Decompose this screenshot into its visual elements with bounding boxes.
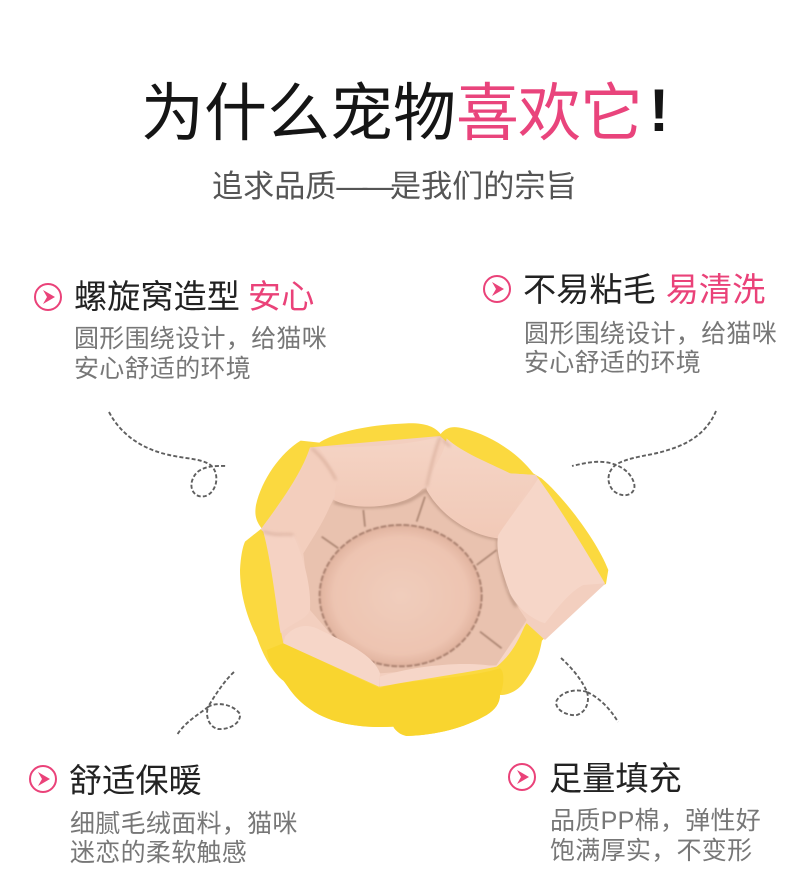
yellow outer shell [240, 423, 608, 736]
heading: 足量填充 [549, 761, 682, 798]
description: 品质PP棉，弹性好 [550, 807, 761, 835]
description [70, 810, 298, 867]
ring seams [322, 497, 502, 648]
heading: 舒适保暖 [69, 763, 202, 800]
description [550, 807, 761, 865]
panel: easy to clean [483, 272, 777, 377]
description: 安心舒适的环境 [524, 349, 701, 377]
panel: comfortable and warm [29, 763, 298, 867]
icon: arrow circle [483, 275, 511, 303]
panel: ample filling [508, 761, 761, 865]
description: 安心舒适的环境 [74, 355, 251, 383]
panel: spiral nest shape [34, 279, 327, 383]
heading: 不易粘毛 易清洗 [523, 272, 765, 309]
petal: upper left [262, 448, 337, 553]
petal: right [497, 478, 605, 623]
title: ! [649, 77, 669, 144]
description [524, 320, 777, 377]
description: 圆形围绕设计，给猫咪 [74, 325, 327, 353]
description: 细腻毛绒面料，猫咪 [70, 810, 298, 838]
petal: bottom [380, 664, 497, 687]
pink lining [261, 436, 605, 687]
petal: top right [427, 438, 536, 538]
petal: top [318, 437, 440, 507]
description: 饱满厚实，不变形 [550, 837, 752, 865]
center cushion [320, 525, 482, 666]
petal: lower right flap [497, 622, 527, 667]
description: 迷恋的柔软触感 [70, 839, 247, 867]
icon: arrow circle [29, 765, 57, 793]
base ring [303, 488, 527, 673]
petal fold creases [263, 437, 450, 535]
heading: 螺旋窝造型安心 [74, 279, 314, 316]
icon: arrow circle [508, 763, 536, 791]
description: 圆形围绕设计，给猫咪 [524, 320, 777, 348]
petal shadows [334, 490, 517, 607]
petal: bottom left [283, 626, 380, 687]
title: 为什么宠物喜欢它 [141, 79, 642, 149]
petal: left [263, 532, 310, 633]
icon: arrow circle [34, 283, 62, 311]
subtitle: 追求品质——是我们的宗旨 [212, 169, 577, 204]
description [74, 325, 327, 383]
yellow front bolster [267, 643, 503, 736]
